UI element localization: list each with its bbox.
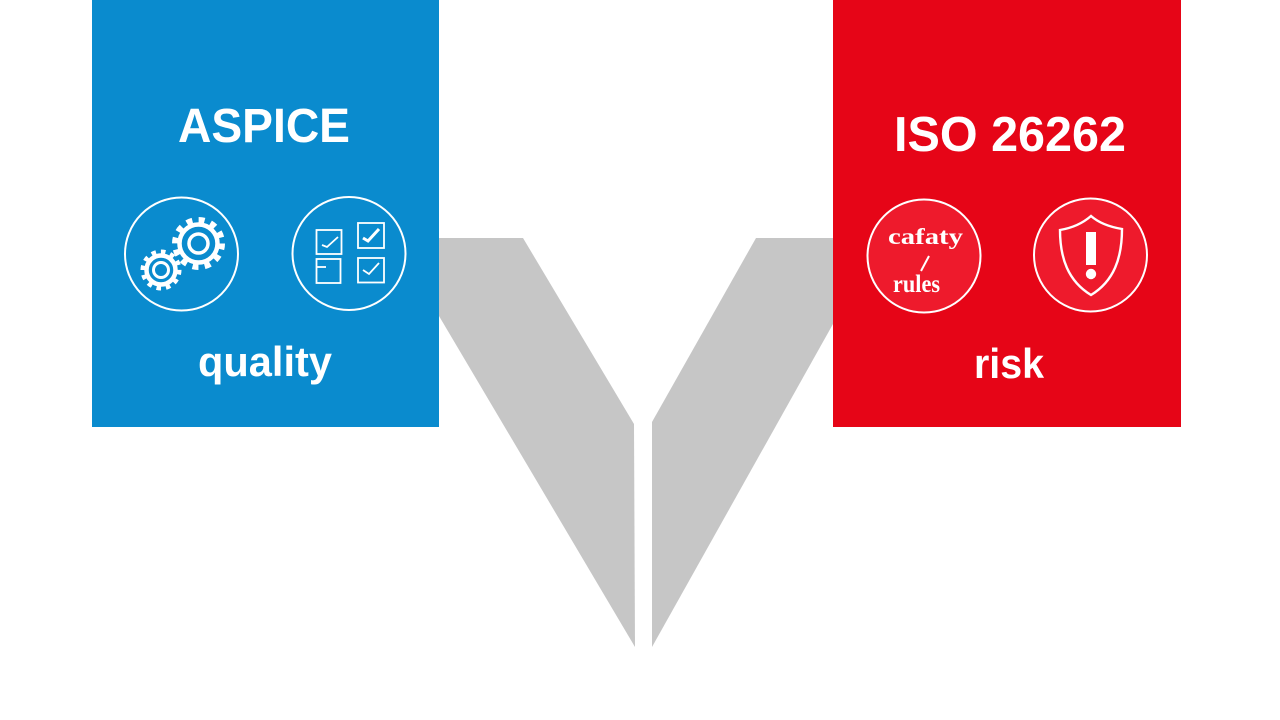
- right arm of V: [652, 238, 833, 647]
- heading: ISO 26262: ISO 26262: [894, 108, 1126, 162]
- label: quality: quality: [198, 338, 333, 385]
- large gear: [175, 220, 222, 267]
- panel: ISO 26262: [833, 0, 1181, 427]
- icon: warning shield in circle: [1034, 198, 1147, 312]
- V-model diagram: [439, 238, 833, 647]
- checkbox: bottom left: [316, 259, 340, 283]
- label: risk: risk: [974, 340, 1045, 387]
- heading: ASPICE: ASPICE: [178, 100, 350, 153]
- panel background: red: [833, 0, 1181, 427]
- checkbox: top right: [358, 223, 384, 248]
- panel background: blue: [92, 0, 439, 427]
- icon: safety rules in circle: cafaty: [888, 224, 964, 249]
- left arm of V: [439, 238, 635, 647]
- panel: ASPICE: [92, 0, 439, 427]
- icon: safety rules in circle: rules: [893, 271, 940, 298]
- icon: gears in circle: [125, 198, 238, 310]
- checkbox: bottom right: [358, 258, 384, 282]
- small gear: [143, 252, 179, 288]
- icon: checklist in circle: [292, 197, 406, 310]
- checkbox: top left: [316, 230, 342, 254]
- icon: safety rules in circle: [868, 200, 980, 312]
